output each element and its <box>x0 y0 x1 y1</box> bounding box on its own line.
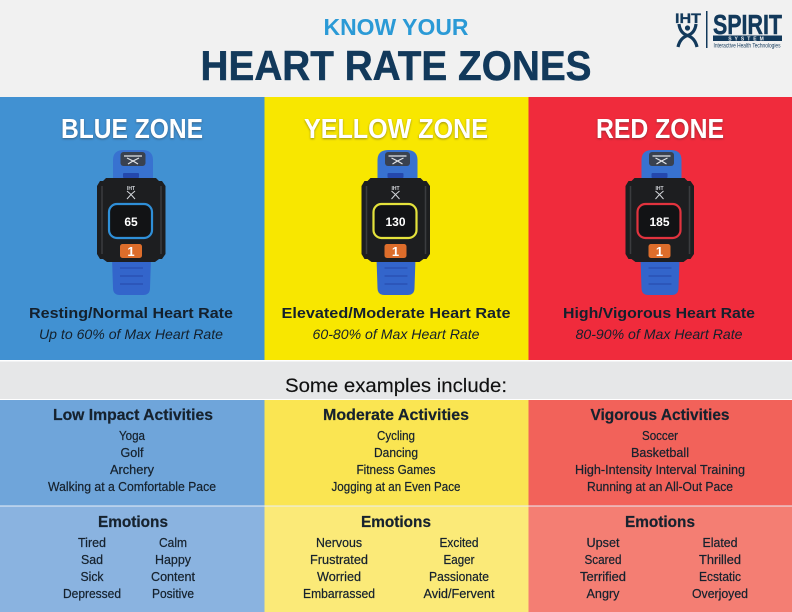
band: some examples include <box>0 361 792 399</box>
panel: moderate activities: Cycling <box>377 429 415 443</box>
icon: blue zone watch: IHT <box>127 186 135 192</box>
heading: blue zone: BLUE ZONE <box>61 113 203 144</box>
icon: red zone watch <box>626 150 694 295</box>
panel: yellow emotions: Eager <box>444 553 474 567</box>
panel: low impact activities: Yoga <box>119 429 145 443</box>
panel: yellow emotions: Embarrassed <box>303 587 375 601</box>
panel: yellow emotions: Frustrated <box>310 553 368 567</box>
panel: yellow emotions: Passionate <box>429 570 489 584</box>
panel: red emotions: Scared <box>584 553 622 567</box>
panel: blue emotions: Depressed <box>63 587 121 601</box>
panel: blue emotions: Content <box>151 570 196 584</box>
panel: low impact activities: Golf <box>120 446 144 460</box>
panel: vigorous activities: High-Intensity Interval Training <box>575 463 745 477</box>
text: red zone description: High/Vigorous Heart Rate <box>563 306 755 322</box>
panel: moderate activities: Fitness Games <box>356 463 436 477</box>
icon: blue zone watch: 65 <box>124 215 138 229</box>
panel: yellow zone <box>264 97 528 360</box>
icon: yellow zone watch: 1 <box>392 244 399 259</box>
panel: moderate activities: Dancing <box>374 446 418 460</box>
text: blue zone range: Up to 60% of Max Heart Rate <box>39 326 223 342</box>
panel: blue emotions: Sad <box>81 553 103 567</box>
text: red zone range: 80-90% of Max Heart Rate <box>576 326 743 342</box>
panel: low impact activities: Archery <box>110 463 155 477</box>
panel: low impact activities: Walking at a Comfortable Pace <box>48 480 216 494</box>
heading: yellow zone: YELLOW ZONE <box>304 113 488 144</box>
icon: yellow zone watch <box>362 150 430 295</box>
panel: moderate activities: Jogging at an Even Pace <box>332 480 461 494</box>
icon: blue zone watch: 1 <box>127 244 135 259</box>
icon: yellow zone watch: IHT <box>391 186 400 192</box>
icon: blue zone watch <box>97 150 166 295</box>
band: some examples include: Some examples include: <box>285 375 507 397</box>
icon: red zone watch: IHT <box>655 186 664 192</box>
panel: low impact activities <box>0 400 264 506</box>
panel: yellow emotions: Worried <box>317 570 361 584</box>
panel: red emotions: Upset <box>586 536 620 550</box>
heading: red zone: RED ZONE <box>596 113 724 144</box>
title: HEART RATE ZONES <box>200 42 592 89</box>
panel: moderate activities <box>264 400 528 506</box>
logo: IHT Spirit System: IHT <box>675 11 702 26</box>
title: KNOW YOUR <box>324 14 469 40</box>
panel: red emotions: Ecstatic <box>699 570 741 584</box>
panel: moderate activities: Moderate Activities <box>323 407 469 424</box>
panel: red emotions: Overjoyed <box>692 587 748 601</box>
panel: blue emotions: Emotions <box>98 514 168 531</box>
panel: red emotions: Emotions <box>625 514 695 531</box>
panel: yellow emotions: Nervous <box>316 536 362 550</box>
panel: red emotions <box>528 506 792 612</box>
panel: red emotions: Thrilled <box>699 553 741 567</box>
panel: blue zone <box>0 97 264 360</box>
panel: red zone <box>528 97 792 360</box>
panel: blue emotions: Tired <box>78 536 106 550</box>
panel: vigorous activities: Vigorous Activities <box>590 407 730 424</box>
icon: red zone watch: 1 <box>656 244 663 259</box>
logo: IHT Spirit System: SYSTEM <box>728 36 767 42</box>
panel: yellow emotions: Emotions <box>361 514 431 531</box>
panel: red emotions: Angry <box>586 587 620 601</box>
text: yellow zone description: Elevated/Moderate Heart Rate <box>282 306 510 322</box>
panel: vigorous activities: Soccer <box>642 429 678 443</box>
icon: red zone watch: 185 <box>649 215 670 229</box>
panel: yellow emotions: Excited <box>440 536 479 550</box>
logo: IHT Spirit System <box>675 9 782 50</box>
panel: vigorous activities: Basketball <box>631 446 689 460</box>
title <box>200 14 592 89</box>
icon: yellow zone watch: 130 <box>385 215 406 229</box>
panel: low impact activities: Low Impact Activities <box>53 407 213 424</box>
panel: red emotions: Elated <box>702 536 738 550</box>
panel: yellow emotions: Avid/Fervent <box>424 587 495 601</box>
panel: blue emotions: Sick <box>80 570 104 584</box>
text: yellow zone range: 60-80% of Max Heart Rate <box>312 326 480 342</box>
panel: vigorous activities: Running at an All-Out Pace <box>587 480 733 494</box>
panel: blue emotions: Happy <box>155 553 192 567</box>
panel: blue emotions <box>0 506 264 612</box>
panel: red emotions: Terrified <box>580 570 626 584</box>
panel: blue emotions: Positive <box>152 587 194 601</box>
text: blue zone description: Resting/Normal Heart Rate <box>29 306 233 322</box>
panel: blue emotions: Calm <box>159 536 187 550</box>
panel: vigorous activities <box>528 400 792 506</box>
panel: yellow emotions <box>264 506 528 612</box>
